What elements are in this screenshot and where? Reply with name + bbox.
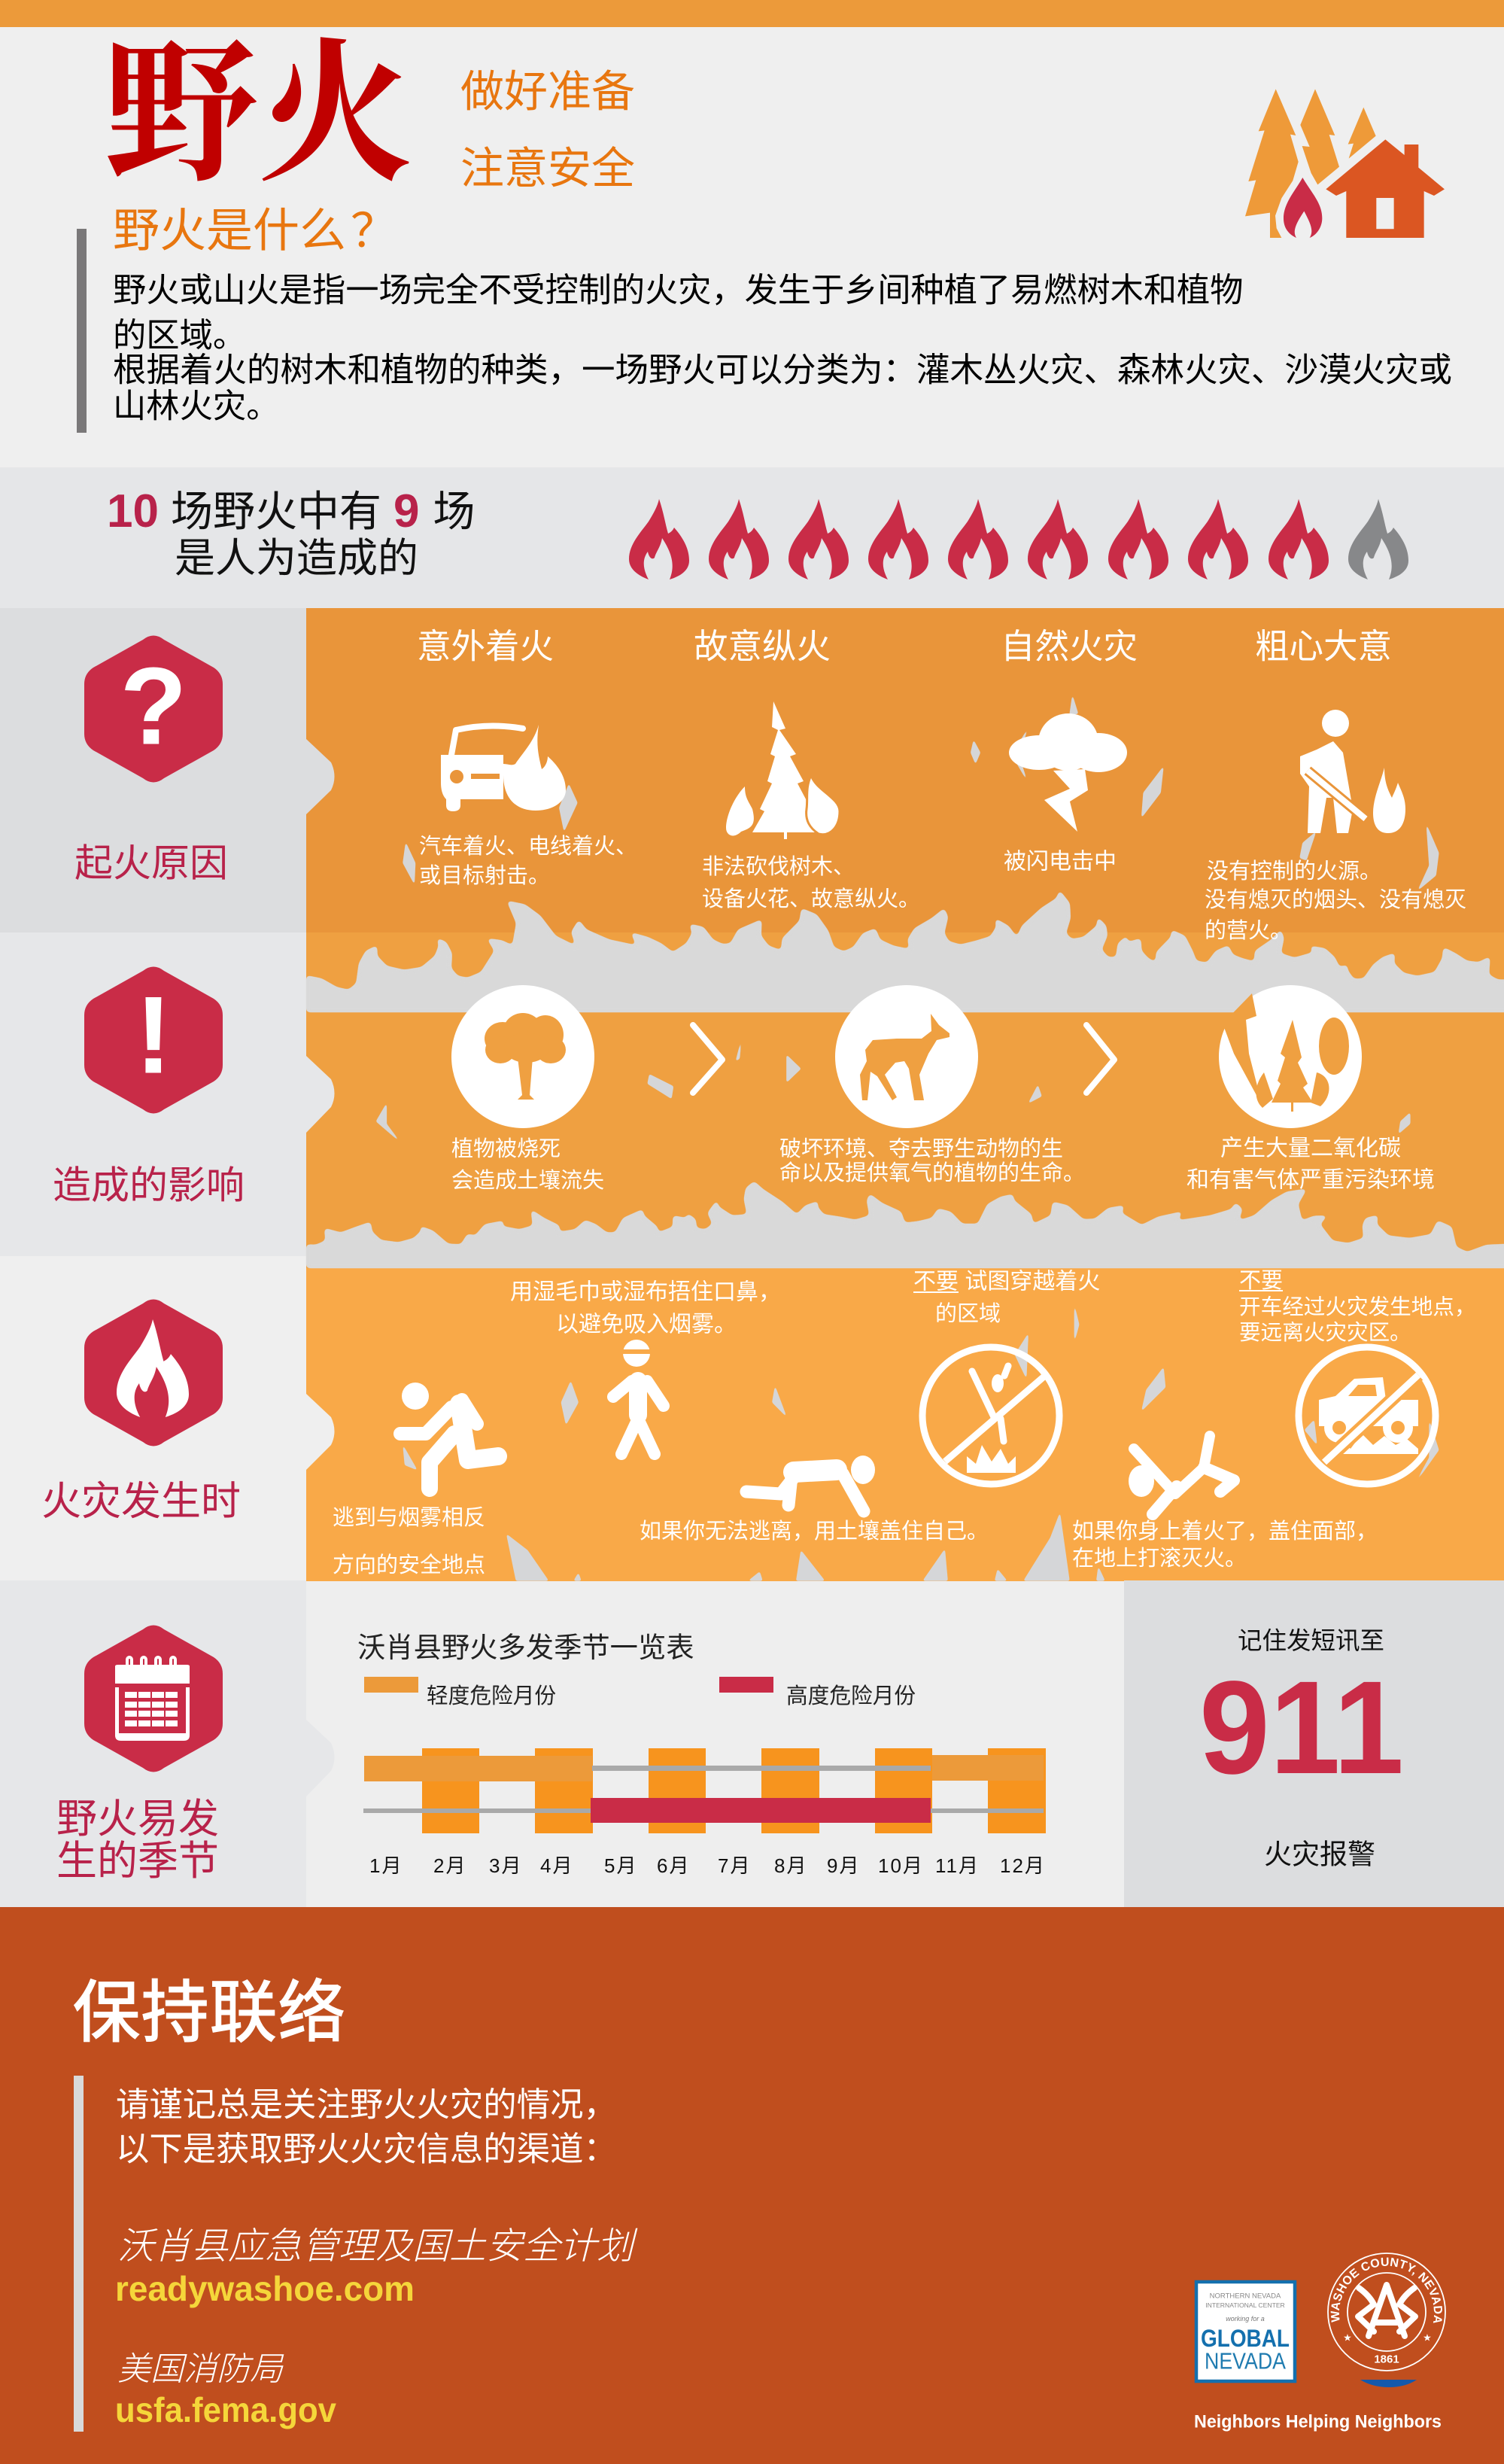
icon: no driving through fire <box>1299 1347 1436 1484</box>
icon: trees, fire and house <box>1245 89 1445 238</box>
text-to prompt: 记住发短讯至 <box>1238 1627 1384 1654</box>
action captions: 在地上打滚灭火。 <box>1072 1546 1247 1571</box>
flames: gray band between effects and actions <box>306 1181 1504 1268</box>
month labels: 12月 <box>1000 1854 1046 1877</box>
chart: fire season timeline <box>363 1748 1046 1877</box>
action captions: 不要 <box>1239 1269 1283 1293</box>
source two: usfa.fema.gov <box>115 2390 336 2429</box>
month labels: 1月 <box>369 1854 403 1877</box>
season label <box>56 1796 219 1884</box>
panel: effects <box>53 966 1435 1207</box>
footer bar <box>74 2076 84 2432</box>
icon: flame hexagon <box>84 1299 223 1446</box>
month labels: 2月 <box>433 1854 466 1877</box>
icon: question hexagon: ? <box>120 644 187 768</box>
top orange strip <box>0 0 1504 27</box>
arrow: chevron one <box>693 1025 722 1093</box>
definition text: 的区域。 <box>113 318 246 354</box>
effect captions: 植物被烧死 <box>451 1136 561 1161</box>
chart title: 沃肖县野火多发季节一览表 <box>357 1632 694 1663</box>
logo: Global Nevada: working for a <box>1226 2315 1265 2323</box>
logo: Washoe County seal: 1861 <box>1374 2353 1399 2366</box>
actions tab notch <box>306 1394 334 1470</box>
cause captions: 非法砍伐树木、 <box>702 854 855 879</box>
logo: Global Nevada <box>1196 2282 1295 2381</box>
cause headings: 意外着火 <box>417 628 554 665</box>
month labels: 4月 <box>540 1854 573 1877</box>
icon: question hexagon <box>84 635 223 783</box>
icon: burning pine tree <box>726 701 840 839</box>
chart legend <box>364 1677 916 1708</box>
season label: 生的季节 <box>56 1839 219 1884</box>
icon: calendar hexagon <box>84 1626 223 1772</box>
effect captions: 破坏环境、夺去野生动物的生 <box>779 1136 1063 1161</box>
effect captions: 和有害气体严重污染环境 <box>1186 1168 1435 1192</box>
icon: deer in circle <box>835 985 978 1128</box>
action captions: 如果你无法逃离，用土壤盖住自己。 <box>640 1519 989 1544</box>
action captions <box>333 1269 1476 1577</box>
pictogram: ten flames <box>629 499 1408 579</box>
effect captions: 会造成土壤流失 <box>451 1168 604 1193</box>
action captions: 逃到与烟雾相反 <box>333 1505 485 1530</box>
icon: burning car <box>441 725 566 811</box>
cause captions: 被闪电击中 <box>1004 849 1117 875</box>
panel: during a fire <box>41 1269 1476 1577</box>
month labels: 10月 <box>878 1854 924 1877</box>
intro text <box>116 2086 617 2167</box>
cause captions: 的营火。 <box>1205 918 1292 943</box>
definition text: 野火或山火是指一场完全不受控制的火灾，发生于乡间种植了易燃树木和植物 <box>113 272 1243 309</box>
causes label: 起火原因 <box>74 841 228 885</box>
season label: 野火易发 <box>56 1796 219 1842</box>
icon: running person <box>400 1383 498 1489</box>
month labels: 5月 <box>604 1854 637 1877</box>
source two <box>115 2351 336 2429</box>
icon: crawling person <box>746 1456 875 1511</box>
panel: text 911 <box>1124 1580 1504 1907</box>
statistic text <box>107 485 475 581</box>
subtitle: be prepared: 做好准备 <box>460 68 635 116</box>
icon: person covering mouth <box>613 1340 664 1454</box>
icon: person with shovel <box>1300 710 1405 833</box>
cause captions: 没有熄灭的烟头、没有熄灭 <box>1205 887 1466 912</box>
source one: readywashoe.com <box>115 2269 415 2308</box>
logo: Washoe County seal: ★ <box>1423 2333 1432 2344</box>
actions label: 火灾发生时 <box>41 1480 241 1523</box>
panel: fire season <box>0 1580 1124 1907</box>
month labels: 3月 <box>489 1854 522 1877</box>
month labels: 7月 <box>718 1854 751 1877</box>
cause headings <box>417 628 1392 665</box>
cause captions: 汽车着火、电线着火、 <box>419 834 637 859</box>
intro text: 以下是获取野火火灾信息的渠道： <box>116 2131 617 2167</box>
logo: Global Nevada: GLOBAL <box>1201 2325 1290 2352</box>
month labels: 8月 <box>774 1854 807 1877</box>
action captions: 用湿毛巾或湿布捂住口鼻， <box>510 1279 781 1305</box>
icon: exclamation hexagon: ! <box>135 974 172 1096</box>
statistic text: 10 场野火中有 9 场 <box>107 485 475 537</box>
statistic text: 是人为造成的 <box>175 536 418 581</box>
subtitle: stay safe: 注意安全 <box>460 144 635 193</box>
cause captions <box>419 834 1466 943</box>
effects label: 造成的影响 <box>53 1164 245 1207</box>
chart legend: 轻度危险月份 <box>427 1684 556 1708</box>
season tab notch <box>306 1720 334 1796</box>
number 911: 911 <box>1199 1654 1404 1802</box>
source two: 美国消防局 <box>117 2351 284 2387</box>
definition text: 山林火灾。 <box>113 388 280 424</box>
icon: burnt tree in circle <box>451 985 594 1128</box>
month labels <box>369 1854 1046 1877</box>
action captions: 如果你身上着火了，盖住面部， <box>1072 1519 1378 1544</box>
icon: cloud and lightning <box>1009 713 1127 832</box>
causes tab notch <box>306 739 334 814</box>
effect captions: 产生大量二氧化碳 <box>1220 1136 1401 1161</box>
cause captions: 没有控制的火源。 <box>1207 859 1381 884</box>
cause headings: 故意纵火 <box>694 628 831 665</box>
definition text: 根据着火的树木和植物的种类，一场野火可以分类为：灌木丛火灾、森林火灾、沙漠火灾或 <box>113 352 1452 388</box>
action captions: 不要 试图穿越着火 <box>913 1269 1100 1294</box>
panel: header <box>0 0 1504 467</box>
logo: Global Nevada: INTERNATIONAL CENTER <box>1205 2301 1285 2309</box>
flame slivers scattered across rows <box>376 695 1439 1581</box>
icon: exclamation hexagon <box>84 966 223 1114</box>
action captions: 以避免吸入烟雾。 <box>556 1313 737 1337</box>
icon: stop drop and roll <box>1129 1436 1234 1514</box>
intro text: 请谨记总是关注野火火灾的情况， <box>116 2086 617 2124</box>
effects tab notch <box>306 1056 334 1133</box>
logo: Washoe County seal <box>1327 2253 1446 2387</box>
blue arc fragment <box>1360 2380 1417 2387</box>
source one <box>115 2226 638 2308</box>
accent bar <box>77 229 87 433</box>
month labels: 6月 <box>657 1854 690 1877</box>
logo: Washoe County seal: ★ <box>1343 2333 1352 2344</box>
flames: gray band between causes and effects <box>306 890 1504 1012</box>
tagline: Neighbors Helping Neighbors <box>1194 2411 1442 2432</box>
logo: Global Nevada: NORTHERN NEVADA <box>1210 2292 1281 2300</box>
panel: stay connected footer <box>0 1907 1504 2464</box>
source one: 沃肖县应急管理及国土安全计划 <box>117 2226 638 2267</box>
cause headings: 自然火灾 <box>1001 628 1138 665</box>
action captions: 方向的安全地点 <box>333 1553 485 1577</box>
definition text <box>113 272 1452 424</box>
action captions: 开车经过火灾发生地点， <box>1239 1295 1476 1319</box>
cause captions: 或目标射击。 <box>419 863 550 888</box>
logo: Washoe County seal: WASHOE COUNTY, NEVADA <box>1330 2258 1442 2323</box>
action captions: 的区域 <box>935 1301 1001 1326</box>
effect captions: 命以及提供氧气的植物的生命。 <box>779 1161 1085 1185</box>
icon: forest fire and smoke in circle <box>1219 985 1362 1128</box>
month labels: 11月 <box>935 1854 980 1877</box>
arrow: chevron two <box>1086 1025 1114 1093</box>
footer heading: 保持联络 <box>72 1975 346 2052</box>
month labels: 9月 <box>827 1854 860 1877</box>
panel: 9 of 10 statistic <box>0 467 1504 608</box>
chart legend: 高度危险月份 <box>786 1684 916 1708</box>
effect captions <box>451 1136 1435 1193</box>
heading: what is a wildfire: 野火是什么？ <box>113 205 397 257</box>
action captions: 要远离火灾灾区。 <box>1239 1321 1411 1345</box>
cause captions: 设备火花、故意纵火。 <box>702 887 920 911</box>
cause headings: 粗心大意 <box>1255 628 1392 665</box>
panel: causes <box>74 628 1466 943</box>
icon: no crossing through fire <box>922 1347 1059 1484</box>
fire alarm caption: 火灾报警 <box>1264 1839 1375 1869</box>
row backgrounds <box>0 608 1504 1581</box>
logo: Global Nevada: NEVADA <box>1205 2348 1286 2374</box>
